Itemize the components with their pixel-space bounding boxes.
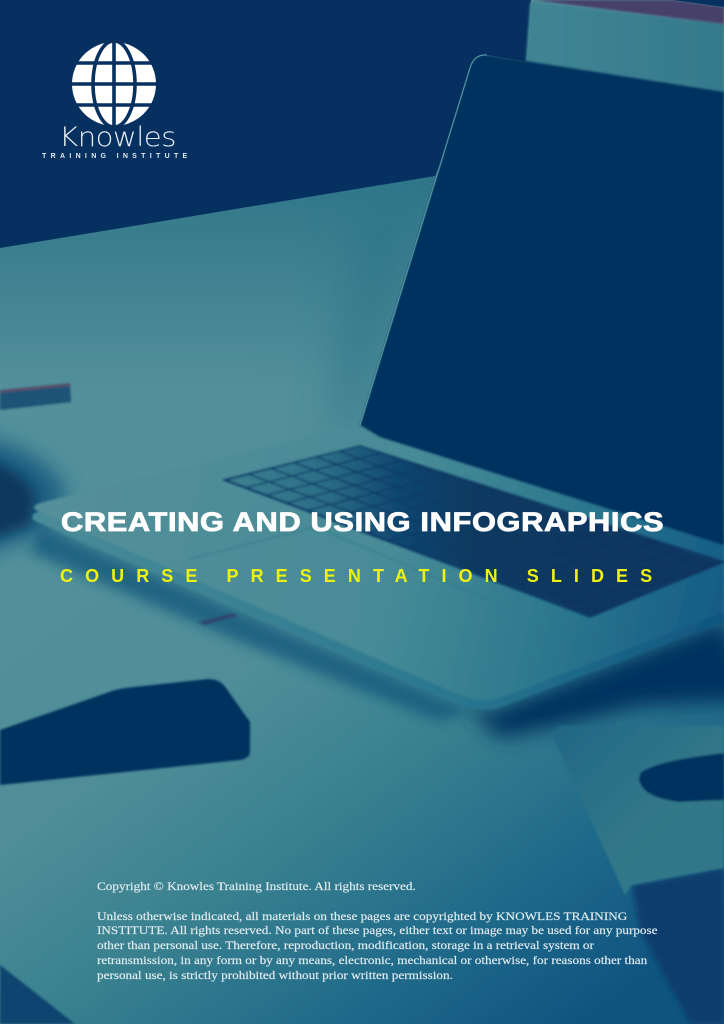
icon: globe <box>72 42 156 125</box>
phone on desk <box>0 679 250 785</box>
laptop shadow on desk <box>30 525 724 738</box>
legal notice: personal use, is strictly prohibited without prior written permission. <box>97 970 453 982</box>
screen edge highlight <box>360 55 487 425</box>
legal notice <box>97 911 658 982</box>
laptop base <box>32 426 724 710</box>
notebook at bottom right <box>551 726 724 895</box>
dark area below the book <box>632 868 724 1024</box>
trackpad outline <box>190 527 490 600</box>
subtitle: COURSE PRESENTATION SLIDES <box>60 566 664 586</box>
left pencil <box>0 383 71 410</box>
copyright text block <box>97 881 658 982</box>
legal notice: INSTITUTE. All rights reserved. No part of these pages, either text or image may be used for any purpose <box>97 925 658 937</box>
legal notice: Unless otherwise indicated, all materials on these pages are copyrighted by KNOWLES TRAINING <box>97 911 627 923</box>
book at top right <box>525 0 724 100</box>
soft shadow beside the screen <box>330 176 435 430</box>
shaded back of the desk <box>0 170 480 390</box>
laptop screen <box>360 55 724 545</box>
legal notice: retransmission, in any form or by any means, electronic, mechanical or otherwise, for reasons other than <box>97 955 647 967</box>
small object under laptop <box>197 613 238 625</box>
dark upper wall <box>0 0 531 248</box>
dark hand at left <box>0 436 66 560</box>
logo tagline: TRAINING INSTITUTE <box>42 153 192 160</box>
keyboard <box>224 446 724 617</box>
logo wordmark: Knowles <box>59 122 176 153</box>
copyright line: Copyright © Knowles Training Institute. All rights reserved. <box>97 881 416 893</box>
logo: Knowles Training Institute <box>42 42 192 160</box>
title: CREATING AND USING INFOGRAPHICS <box>61 507 664 537</box>
legal notice: other than personal use. Therefore, reproduction, modification, storage in a retrieval system or <box>97 940 594 952</box>
dark wedge at bottom left <box>0 965 75 1024</box>
